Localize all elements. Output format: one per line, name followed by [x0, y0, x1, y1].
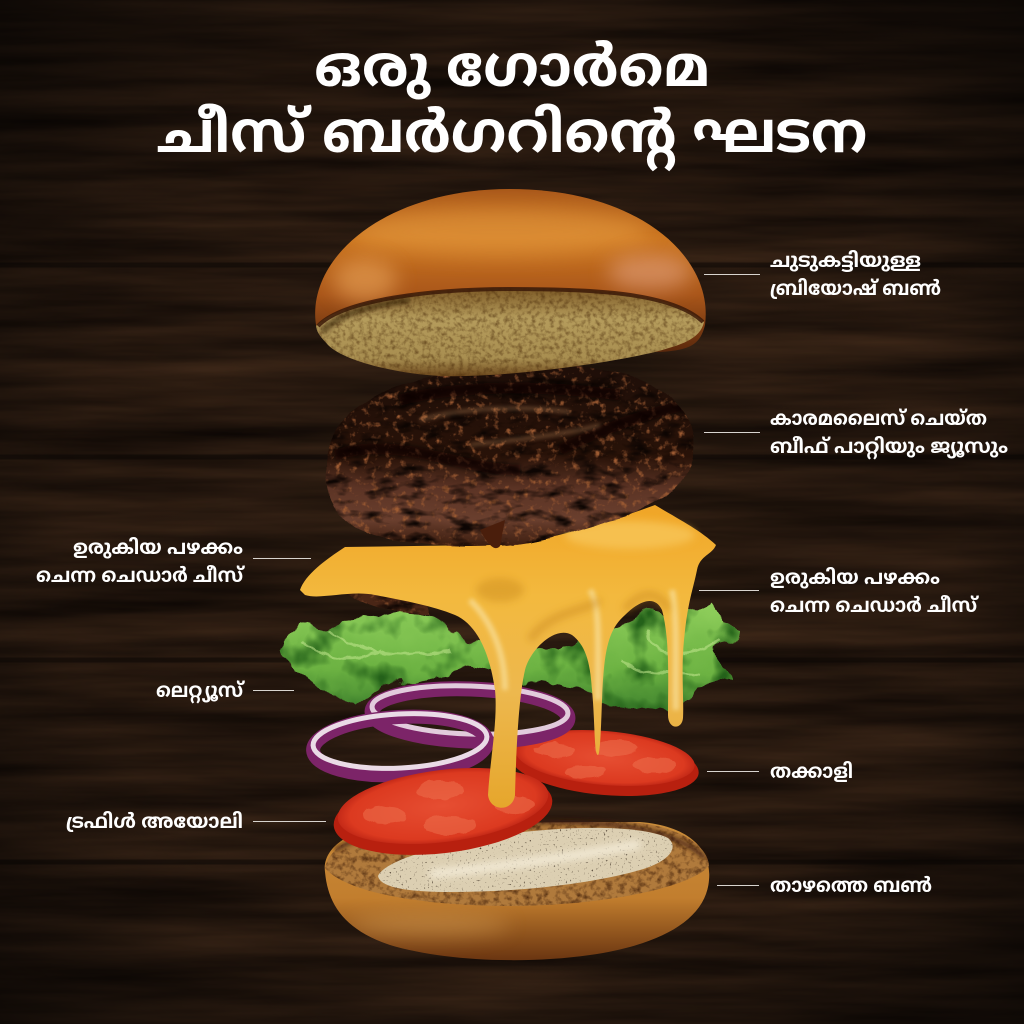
label: brioche bun: ബ്രിയോഷ് ബൺ [770, 278, 941, 300]
top brioche bun [315, 189, 706, 376]
title: ചീസ് ബർഗറിന്റെ ഘടന [157, 101, 867, 171]
label: cheddar left: ഉരുകിയ പഴക്കം [73, 537, 243, 559]
burger illustration [282, 189, 743, 960]
label: tomato: തക്കാളി [770, 761, 853, 783]
left tomato [329, 757, 557, 866]
label: lettuce: ലെറ്റ്യൂസ് [156, 680, 245, 704]
lettuce [282, 602, 743, 712]
melted cheddar cheese [300, 505, 716, 808]
bottom bun [325, 822, 709, 960]
title [157, 35, 867, 171]
title: ഒരു ഗോർമെ [314, 35, 710, 99]
label: cheddar right: ഉരുകിയ പഴക്കം [770, 567, 940, 589]
label: cheddar right: ചെന്ന ചെഡാർ ചീസ് [770, 595, 979, 617]
label: cheddar left: ചെന്ന ചെഡാർ ചീസ് [36, 565, 245, 587]
beef patty [325, 366, 694, 548]
label: bottom bun: താഴത്തെ ബൺ [770, 875, 932, 897]
label: brioche bun [704, 250, 941, 300]
right tomato [509, 723, 701, 803]
label: beef patty: കാരമലൈസ് ചെയ്ത [770, 408, 987, 430]
label: cheddar left [36, 537, 311, 587]
label: truffle aioli: ട്രഫിൾ അയോലി [66, 811, 243, 833]
label: beef patty: ബീഫ് പാറ്റിയും ജ്യൂസും [770, 436, 1008, 460]
label: beef patty [704, 408, 1008, 460]
lower patty edge [338, 580, 430, 615]
onion rings [312, 683, 569, 780]
label: cheddar right [699, 567, 979, 617]
label: brioche bun: ചുടുകട്ടിയുള്ള [770, 250, 921, 272]
label: lettuce [156, 680, 294, 704]
